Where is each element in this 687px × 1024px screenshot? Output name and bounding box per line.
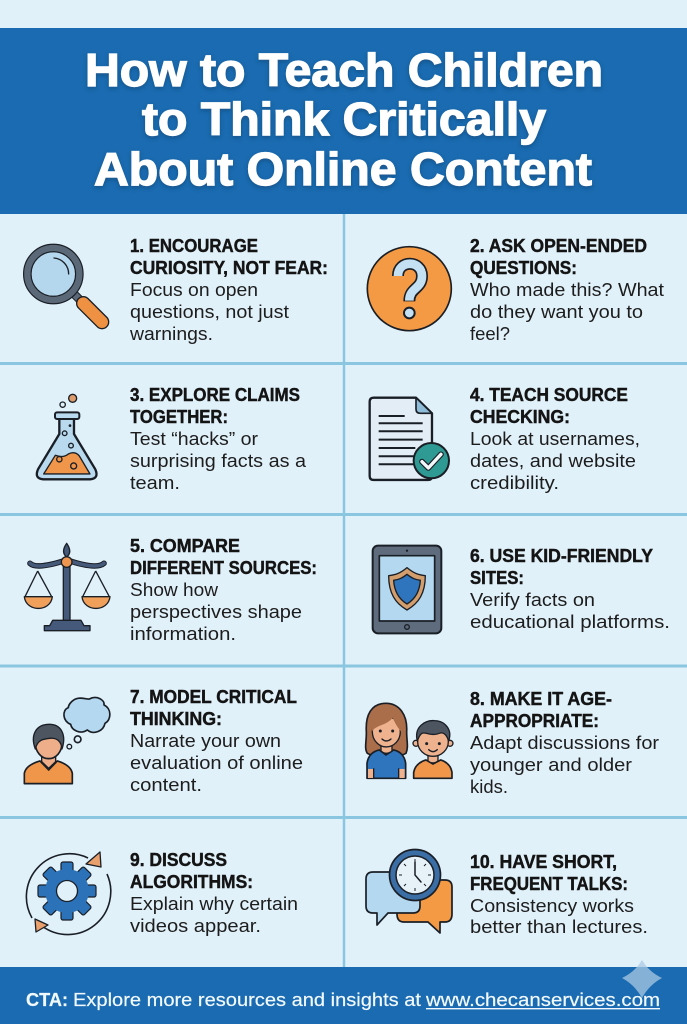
- text: item 4: [470, 385, 640, 493]
- text: item 5: DIFFERENT SOURCES:: [130, 558, 317, 578]
- text: item 8: APPROPRIATE:: [470, 711, 599, 731]
- icon: question mark: [367, 247, 451, 331]
- text: item 8: [470, 689, 659, 797]
- text: item 7: 7. MODEL CRITICAL: [130, 687, 297, 707]
- text: item 7: evaluation of online: [130, 753, 303, 773]
- text: item 7: Narrate your own: [130, 731, 281, 751]
- text: item 9: 9. DISCUSS: [130, 850, 227, 870]
- CTA text: CTA:: [26, 989, 68, 1010]
- text: item 8: 8. MAKE IT AGE-: [470, 689, 612, 709]
- panel: 1 encourage curiosity: [0, 214, 343, 362]
- text: item 10: FREQUENT TALKS:: [470, 874, 628, 894]
- text: item 8: Adapt discussions for: [470, 733, 659, 753]
- CTA text: [26, 989, 660, 1010]
- text: item 3: team.: [130, 473, 180, 493]
- icon: magnifying glass: [27, 248, 102, 322]
- text: item 5: [130, 536, 317, 644]
- text: item 6: Verify facts on: [470, 590, 595, 610]
- text: item 10: [470, 852, 648, 937]
- text: item 5: Show how: [130, 580, 219, 600]
- CTA text: www.checanservices.com: [425, 989, 660, 1010]
- icon: gear with cycle arrows: [26, 852, 111, 935]
- panel: 2 ask open-ended questions: [345, 214, 687, 362]
- text: item 1: CURIOSITY, NOT FEAR:: [130, 258, 328, 278]
- text: item 7: THINKING:: [130, 709, 222, 729]
- panel: 9 discuss algorithms: [0, 819, 343, 967]
- footer call to action: [0, 960, 687, 1024]
- icon: document with check: [370, 398, 449, 480]
- text: item 2: Who made this? What: [470, 280, 664, 300]
- text: item 8: kids.: [470, 777, 508, 797]
- text: item 3: surprising facts as a: [130, 451, 307, 471]
- panel: 6 use kid-friendly sites: [345, 516, 687, 664]
- text: item 8: younger and older: [470, 755, 632, 775]
- icon: flask: [37, 394, 97, 479]
- panel: 7 model critical thinking: [0, 668, 343, 816]
- text: item 9: videos appear.: [130, 916, 261, 936]
- panel: 4 teach source checking: [345, 365, 687, 513]
- text: item 3: [130, 385, 307, 493]
- text: item 10: 10. HAVE SHORT,: [470, 852, 617, 872]
- text: item 2: QUESTIONS:: [470, 258, 577, 278]
- text: item 5: information.: [130, 624, 236, 644]
- panel: 3 explore claims together: [0, 365, 343, 513]
- text: item 9: [130, 850, 298, 936]
- icon: parent and child: [366, 703, 453, 778]
- text: item 5: perspectives shape: [130, 602, 302, 622]
- icon: tablet with shield: [373, 546, 441, 633]
- text: item 4: CHECKING:: [470, 407, 570, 427]
- icon: sparkle: [622, 960, 662, 998]
- icon: balance scales: [24, 543, 110, 631]
- text: item 2: [470, 236, 664, 344]
- text: item 4: dates, and website: [470, 451, 636, 471]
- text: item 6: 6. USE KID-FRIENDLY: [470, 546, 653, 566]
- text: item 6: educational platforms.: [470, 612, 670, 632]
- text: item 3: TOGETHER:: [130, 407, 228, 427]
- icon: chat bubbles with clock: [366, 850, 452, 933]
- text: item 3: 3. EXPLORE CLAIMS: [130, 385, 300, 405]
- text: item 4: 4. TEACH SOURCE: [470, 385, 628, 405]
- text: item 2: 2. ASK OPEN-ENDED: [470, 236, 647, 256]
- text: item 10: better than lectures.: [470, 917, 648, 937]
- text: item 5: 5. COMPARE: [130, 536, 240, 556]
- text: item 1: 1. ENCOURAGE: [130, 236, 258, 256]
- text: item 2: feel?: [470, 324, 510, 344]
- text: item 1: [129, 236, 328, 344]
- title: How to Teach Children: [85, 44, 603, 96]
- panel: 8 make it age-appropriate: [345, 668, 687, 816]
- text: item 1: Focus on open: [130, 280, 258, 300]
- title: About Online Content: [94, 143, 592, 195]
- title banner: [0, 28, 687, 214]
- CTA text: Explore more resources and insights at: [73, 989, 421, 1010]
- text: item 6: SITES:: [470, 568, 524, 588]
- title: [85, 44, 603, 195]
- text: item 2: do they want you to: [470, 302, 643, 322]
- text: item 7: [130, 687, 303, 795]
- text: item 6: [470, 546, 670, 632]
- text: item 10: Consistency works: [470, 896, 634, 916]
- text: item 4: credibility.: [470, 473, 559, 493]
- text: item 9: Explain why certain: [130, 894, 298, 914]
- text: item 1: questions, not just: [130, 302, 289, 322]
- text: item 7: content.: [130, 775, 202, 795]
- panel: 10 short frequent talks: [345, 819, 687, 967]
- text: item 3: Test “hacks” or: [130, 429, 258, 449]
- title: to Think Critically: [142, 93, 546, 145]
- icon: person with thought cloud: [24, 698, 110, 784]
- text: item 9: ALGORITHMS:: [130, 872, 253, 892]
- panel: 5 compare different sources: [0, 516, 343, 664]
- text: item 4: Look at usernames,: [470, 429, 640, 449]
- text: item 1: warnings.: [129, 324, 213, 344]
